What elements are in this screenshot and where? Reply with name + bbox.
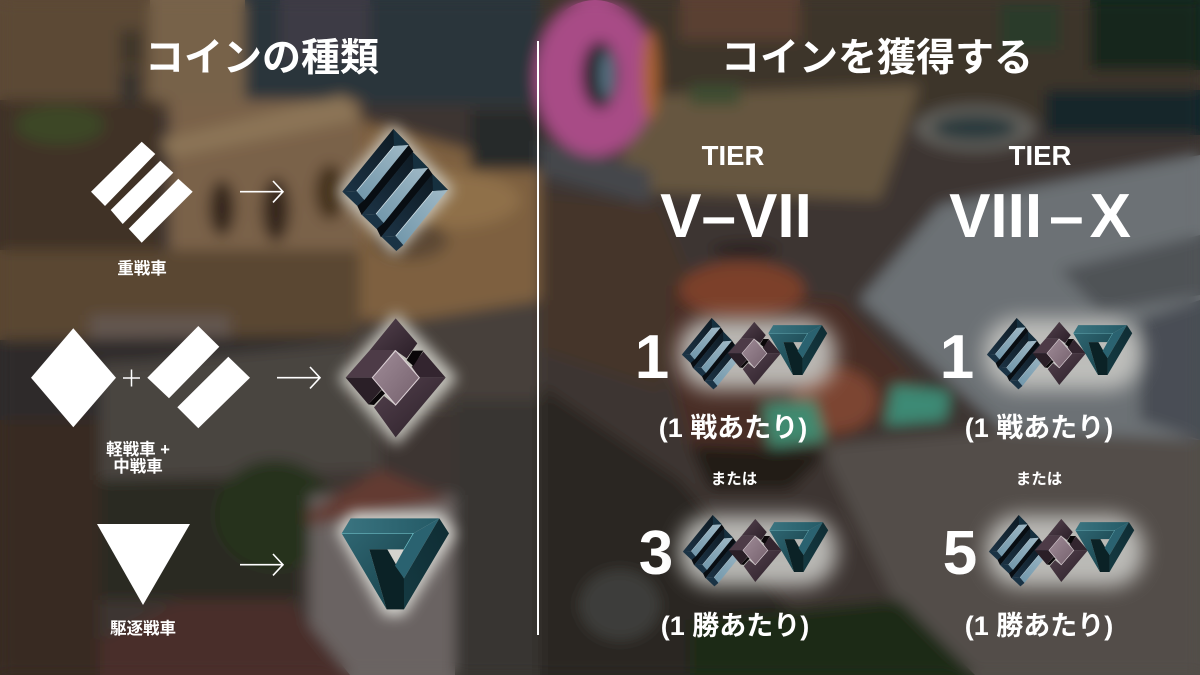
divider line [537, 41, 539, 635]
icon: tank destroyer class [97, 524, 190, 605]
text: or: または [711, 470, 757, 488]
text: per win: (1 勝あたり) [965, 611, 1113, 641]
tier range: V–VII [660, 182, 812, 251]
coin: tank destroyer [336, 512, 456, 616]
arrow: tank destroyer to coin [240, 554, 283, 575]
coin: light and medium [338, 312, 458, 446]
label: heavy tanks: 重戦車 [117, 258, 167, 278]
label: light and medium tanks [106, 439, 170, 476]
amount per battle: 1 [940, 323, 974, 392]
label: tank destroyers: 駆逐戦車 [110, 618, 176, 638]
icon: heavy tank class [91, 142, 193, 243]
coin: heavy [336, 124, 454, 256]
heading: earning coins: コインを獲得する [721, 37, 1033, 80]
panel: tier VIII-X [940, 140, 1144, 641]
arrow: heavy to coin [240, 181, 283, 202]
text: per win: (1 勝あたり) [661, 611, 809, 641]
amount per battle: 1 [635, 323, 669, 392]
amount per win: 5 [943, 519, 977, 588]
amount per win: 3 [639, 519, 673, 588]
plus sign [123, 370, 140, 386]
coin group: per win [986, 515, 1144, 587]
text: or: または [1016, 470, 1062, 488]
coin group: per battle [984, 318, 1142, 390]
label: light and medium tanks: 軽戦車 + [106, 439, 170, 459]
tier label: TIER [702, 140, 764, 171]
text: per battle: (1 戦あたり) [659, 413, 807, 443]
heading: coin types: コインの種類 [145, 37, 379, 80]
coin group: per battle [678, 318, 836, 390]
panel: coin types [31, 124, 458, 638]
tier label: TIER [1009, 140, 1071, 171]
panel: tier V-VII [635, 140, 837, 641]
label: light and medium tanks: 中戦車 [113, 456, 163, 476]
icon: light and medium tank class [31, 326, 250, 428]
tier range: VIII–X [949, 182, 1131, 251]
coin group: per win [679, 515, 837, 587]
arrow: light and medium to coin [277, 367, 320, 388]
text: per battle: (1 戦あたり) [965, 413, 1113, 443]
